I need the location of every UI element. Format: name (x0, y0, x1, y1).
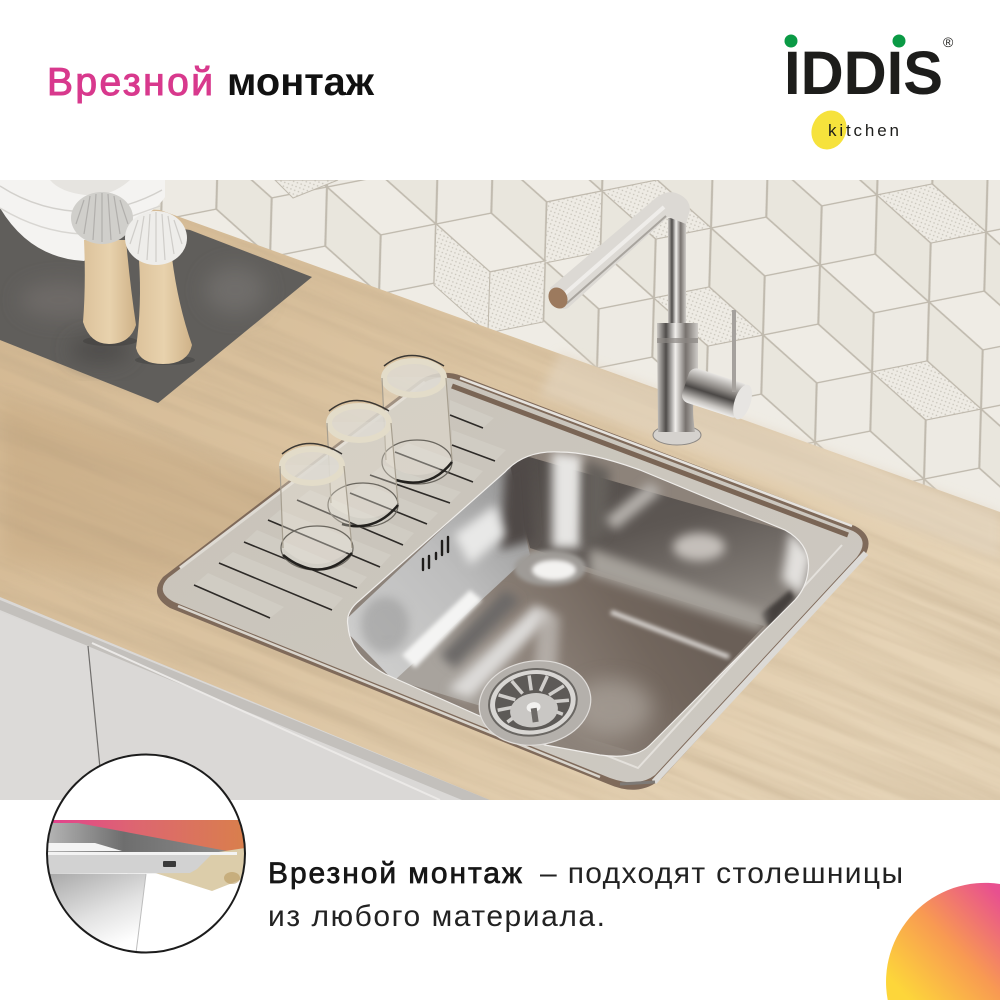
logo wordmark: IDDIS (784, 39, 943, 107)
caption (268, 857, 903, 933)
caption rest of line 1: – подходят столешницы (540, 857, 903, 890)
sink bowl (340, 445, 820, 765)
bowl floor (395, 555, 764, 755)
logo dots (784, 34, 906, 48)
title: pink word: Врезной (47, 61, 213, 104)
glass 3 (382, 356, 452, 484)
spout tip (548, 288, 568, 308)
corner gradient circle (886, 883, 1000, 1000)
pepper mill: left (71, 192, 137, 346)
glasses (280, 356, 452, 570)
drainboard ribs (278, 401, 462, 512)
title (47, 61, 374, 104)
logo: IDDIS kitchen (784, 34, 954, 155)
sink outer edge (157, 373, 869, 790)
drainboard slots (194, 415, 495, 618)
yellow blob (805, 105, 853, 155)
faucet collar and body (657, 323, 698, 432)
stacked plates (0, 180, 165, 261)
glass 1 (280, 444, 353, 570)
faucet (545, 192, 756, 445)
bowl back wall (510, 456, 802, 598)
faucet riser (668, 218, 686, 328)
sink (157, 373, 869, 790)
slate mat (0, 200, 312, 403)
sink deck (163, 377, 863, 782)
countertop top surface (53, 820, 244, 851)
white lower panel (0, 800, 1000, 1000)
title: black word: монтаж (227, 61, 374, 104)
pepper mill: right (125, 211, 195, 365)
faucet base (653, 425, 701, 445)
sink side face (48, 855, 211, 874)
inset circle: cutaway of built-in mounting (47, 754, 245, 955)
caption bold lead: Врезной монтаж (268, 857, 522, 890)
faucet handle (682, 368, 752, 420)
registered mark: ® (943, 34, 954, 50)
lower sink wall (47, 874, 146, 955)
faucet lever (732, 310, 736, 392)
cabinet fronts (0, 590, 520, 800)
sink steel surface (47, 823, 238, 853)
caption line 2: из любого материала. (268, 900, 605, 933)
drain strainer (478, 660, 592, 746)
kitchen photo (0, 180, 1000, 800)
clip slot (163, 861, 176, 867)
bowl reflections (361, 452, 812, 736)
logo subtitle: kitchen (828, 121, 899, 140)
faucet spout (550, 192, 690, 309)
bowl rim line (348, 452, 809, 756)
countertop stone edge (152, 848, 245, 891)
glass 2 (327, 400, 398, 527)
polished lip highlights (178, 378, 866, 784)
overflow slots (423, 537, 448, 570)
bowl left wall (340, 465, 530, 682)
wooden countertop (0, 200, 1000, 800)
backsplash tiles (154, 180, 1000, 512)
